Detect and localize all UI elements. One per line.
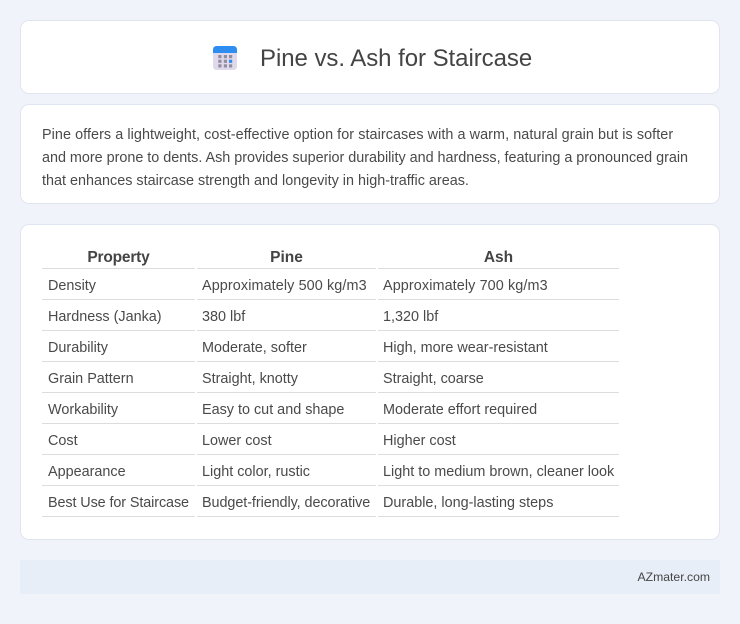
comparison table: Grain Pattern	[48, 371, 134, 387]
comparison table: Moderate, softer	[202, 340, 307, 356]
comparison table: Appearance	[48, 464, 126, 480]
comparison table: Density	[48, 278, 96, 294]
panel: title card	[20, 20, 720, 94]
comparison table: Budget-friendly, decorative	[202, 495, 370, 511]
comparison table: Workability	[48, 402, 118, 418]
footer credit: AZmater.com	[638, 570, 710, 584]
footer bar	[20, 560, 720, 594]
comparison table: Pine	[270, 249, 303, 266]
comparison table: Approximately 500 kg/m3	[202, 278, 367, 294]
panel: comparison table card	[20, 224, 720, 540]
comparison table: Easy to cut and shape	[202, 402, 344, 418]
comparison table: Straight, coarse	[383, 371, 484, 387]
title: Pine vs. Ash for Staircase	[260, 45, 532, 72]
summary text: that enhances staircase strength and longevity in high-traffic areas.	[42, 173, 469, 189]
comparison table: 1,320 lbf	[383, 309, 438, 325]
comparison table: Approximately 700 kg/m3	[383, 278, 548, 294]
comparison table: Durability	[48, 340, 108, 356]
summary text	[42, 127, 688, 189]
comparison table: Straight, knotty	[202, 371, 298, 387]
comparison table: 380 lbf	[202, 309, 245, 325]
summary text: Pine offers a lightweight, cost-effective option for staircases with a warm, natural grain but is softer	[42, 127, 673, 143]
comparison table: Higher cost	[383, 433, 456, 449]
panel: summary card	[20, 104, 720, 204]
comparison table: Ash	[484, 249, 513, 266]
icon: calendar	[213, 46, 237, 70]
comparison table: Cost	[48, 433, 78, 449]
comparison table: High, more wear-resistant	[383, 340, 548, 356]
comparison table: Moderate effort required	[383, 402, 537, 418]
comparison table: Durable, long-lasting steps	[383, 495, 553, 511]
comparison table: Lower cost	[202, 433, 272, 449]
comparison table: Light to medium brown, cleaner look	[383, 464, 614, 480]
comparison table: Light color, rustic	[202, 464, 310, 480]
comparison table: Best Use for Staircase	[48, 495, 189, 511]
summary text: and more prone to dents. Ash provides superior durability and hardness, featuring a pronounced grain	[42, 150, 688, 166]
comparison table: Hardness (Janka)	[48, 309, 162, 325]
comparison table: Property	[87, 249, 150, 266]
